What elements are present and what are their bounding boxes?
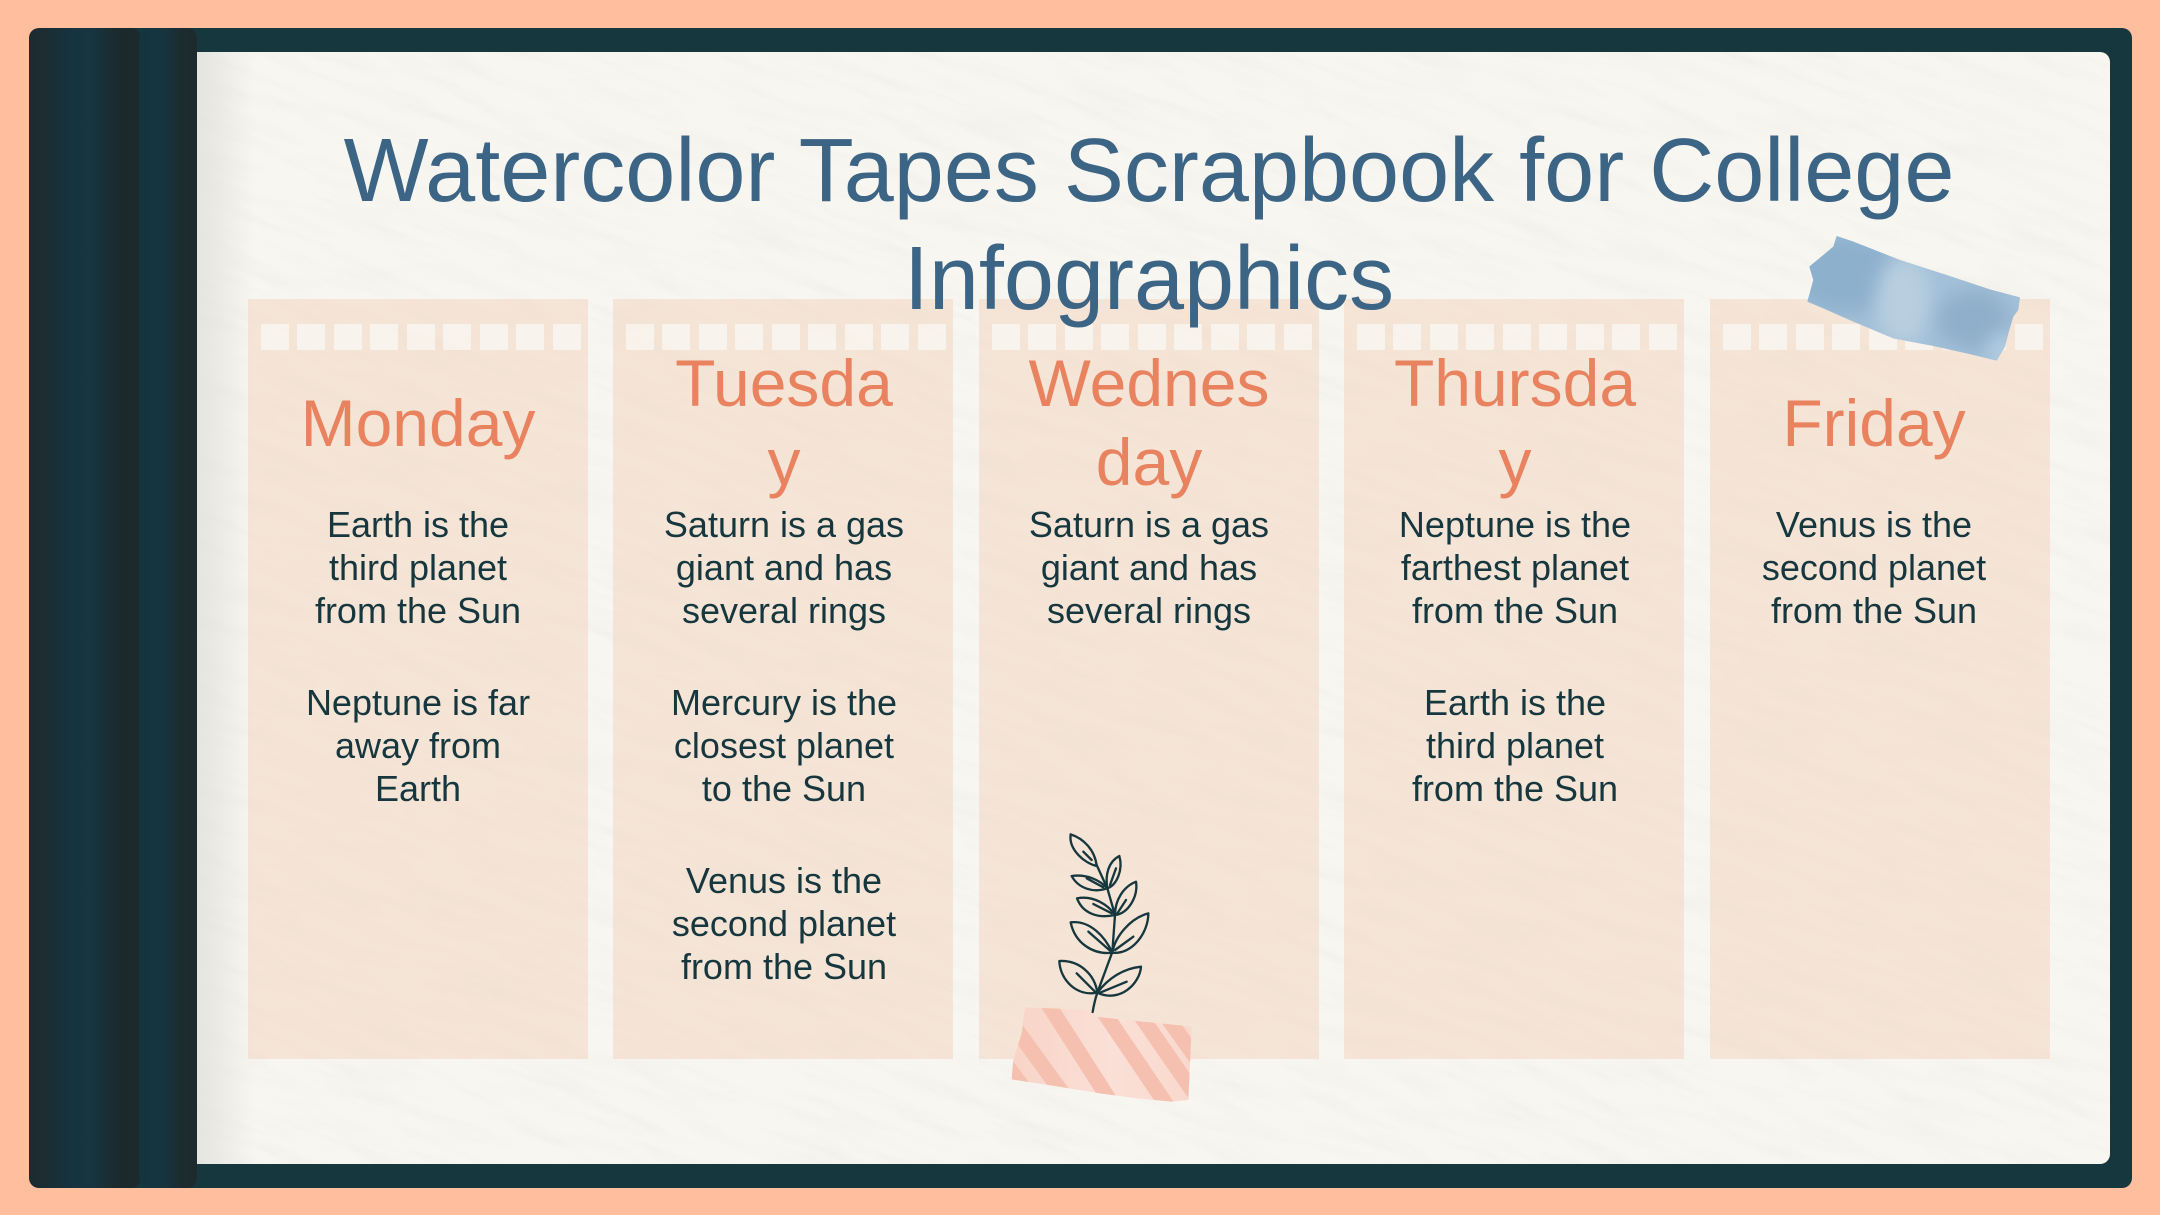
text: Monday item 1: from the Sun — [315, 590, 521, 631]
heading: Friday: Friday — [1782, 386, 1966, 460]
title: Infographics — [904, 228, 1394, 328]
tape: pink striped — [1012, 1008, 1192, 1102]
text: Tuesday item 2: to the Sun — [702, 768, 866, 809]
title — [344, 120, 1954, 328]
heading: Thursday: Thursda — [1394, 346, 1636, 420]
heading: Thursday: y — [1498, 425, 1532, 499]
panel: Wednesday — [979, 299, 1319, 1059]
text: Monday item 2: away from — [335, 725, 501, 766]
text: Wednesday item 1 — [1029, 504, 1269, 631]
heading: Wednesday — [1028, 346, 1269, 499]
text: Tuesday item 2: closest planet — [674, 725, 894, 766]
text: Tuesday item 1: giant and has — [676, 547, 892, 588]
panel: Tuesday — [613, 299, 953, 1059]
text: Tuesday item 3: Venus is the — [686, 860, 882, 901]
text: Monday item 2 — [306, 682, 530, 809]
left spine front — [139, 28, 197, 1188]
text: Tuesday item 1 — [664, 504, 904, 631]
text: Monday item 1: third planet — [329, 547, 507, 588]
text: Thursday item 2: from the Sun — [1412, 768, 1618, 809]
text: Wednesday item 1: giant and has — [1041, 547, 1257, 588]
text: Thursday item 1: from the Sun — [1412, 590, 1618, 631]
tape: blue watercolor — [1808, 236, 2020, 360]
text: Thursday item 1 — [1399, 504, 1631, 631]
panel: Friday — [1710, 299, 2050, 1059]
text: Wednesday item 1: Saturn is a gas — [1029, 504, 1269, 545]
text: Friday item 1: Venus is the — [1776, 504, 1972, 545]
icon: plant sprig — [1058, 833, 1150, 1014]
text: Thursday item 2: third planet — [1426, 725, 1604, 766]
heading: Thursday — [1394, 346, 1636, 499]
heading: Wednesday: day — [1096, 425, 1202, 499]
text: Thursday item 1: Neptune is the — [1399, 504, 1631, 545]
heading: Monday: Monday — [301, 386, 535, 460]
text: Tuesday item 1: Saturn is a gas — [664, 504, 904, 545]
heading: Tuesday: y — [768, 425, 800, 499]
text: Tuesday item 2: Mercury is the — [671, 682, 897, 723]
heading: Wednesday: Wednes — [1029, 346, 1269, 420]
text: Monday item 2: Earth — [375, 768, 461, 809]
text: Thursday item 2 — [1412, 682, 1618, 809]
panel: Thursday — [1344, 299, 1684, 1059]
text: Tuesday item 3: second planet — [672, 903, 896, 944]
text: Tuesday item 2 — [671, 682, 897, 809]
left spine rear — [29, 28, 141, 1188]
panel: Monday — [248, 299, 588, 1059]
title: Watercolor Tapes Scrapbook for College — [344, 120, 1954, 220]
text: Friday item 1 — [1762, 504, 1986, 631]
text: Thursday item 2: Earth is the — [1424, 682, 1606, 723]
text: Friday item 1: second planet — [1762, 547, 1986, 588]
heading: Tuesday — [675, 346, 893, 499]
text: Monday item 1: Earth is the — [327, 504, 509, 545]
text: Wednesday item 1: several rings — [1047, 590, 1251, 631]
text: Thursday item 1: farthest planet — [1401, 547, 1629, 588]
text: Tuesday item 1: several rings — [682, 590, 886, 631]
text: Tuesday item 3 — [672, 860, 896, 987]
text: Friday item 1: from the Sun — [1771, 590, 1977, 631]
text: Monday item 2: Neptune is far — [306, 682, 530, 723]
text: Tuesday item 3: from the Sun — [681, 946, 887, 987]
text: Monday item 1 — [315, 504, 521, 631]
heading: Tuesday: Tuesda — [675, 346, 893, 420]
